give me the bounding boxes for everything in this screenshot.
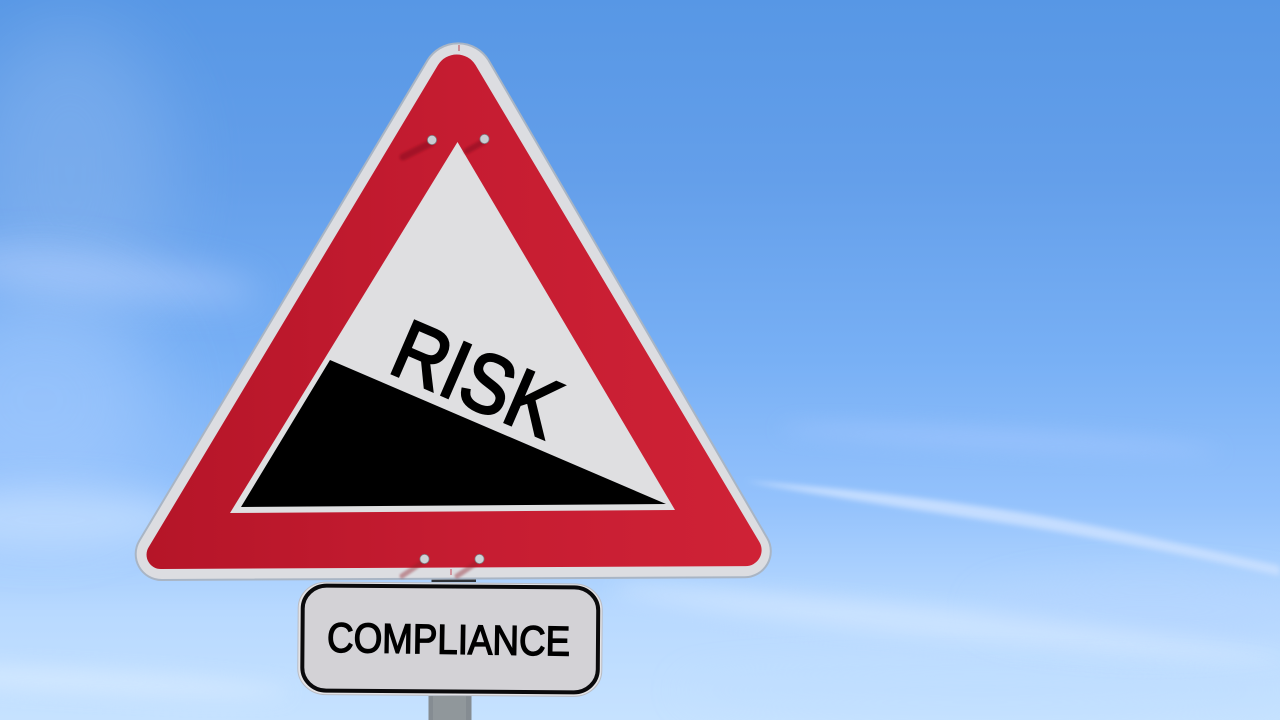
sign post xyxy=(428,696,472,720)
plate black border xyxy=(302,585,598,693)
triangle rim xyxy=(136,43,771,580)
white inner triangle xyxy=(230,142,675,513)
RISK label: RISK xyxy=(379,302,574,456)
COMPLIANCE label: COMPLIANCE xyxy=(327,614,570,665)
plate body xyxy=(298,582,602,697)
black slope xyxy=(241,360,666,507)
rivets with shadows xyxy=(402,45,489,576)
post bracket xyxy=(432,577,476,582)
warning triangle sign xyxy=(136,43,771,580)
compliance plate xyxy=(298,582,602,697)
red border xyxy=(147,55,762,569)
